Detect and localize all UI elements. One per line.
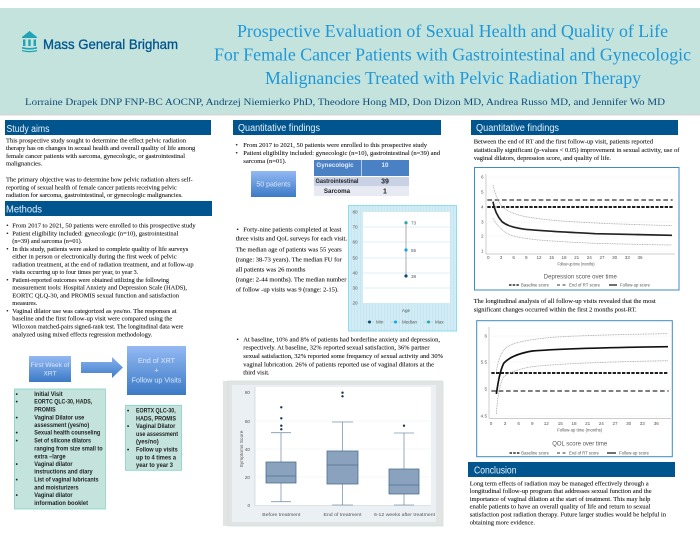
chart: QOL score over time: 5	[484, 387, 487, 392]
chart: age min median max: 30	[352, 286, 358, 290]
chart: symptoms score box plot: End of treatment	[324, 512, 362, 517]
list: initial visit items: Vaginal dilator	[34, 492, 73, 499]
list: follow up items: •	[127, 407, 129, 414]
methods bullet list: In this study, patients were asked to complete quality of life surveys	[12, 246, 189, 253]
study aims text: radiation for sarcoma, gastrointestinal, or gynecologic malignancies.	[6, 192, 183, 199]
chart: QOL score over time: 36	[654, 421, 659, 426]
chart: age min median max: 38	[411, 274, 417, 279]
methods bullet list	[6, 223, 196, 338]
methods bullet list: •	[6, 230, 9, 237]
list: initial visit items: •	[16, 461, 18, 468]
box: first week of XRT: XRT	[43, 370, 57, 378]
chart: depression score over time: 0	[487, 255, 490, 260]
list: initial visit items: EORTC QLC-30, HADS,	[34, 399, 93, 406]
title: For Female Cancer Patients with Gastrointestinal and Gynecologic	[214, 45, 691, 65]
chart: depression score over time: 4	[481, 205, 484, 210]
chart: QOL score over time: 6	[484, 334, 487, 339]
age text: •	[236, 227, 239, 234]
chart: depression score over time: 30	[612, 255, 618, 260]
list: follow up items	[126, 405, 182, 470]
table: tumour sites	[314, 160, 409, 196]
age text: all patients was 26 months	[236, 267, 306, 274]
methods bullet list: •	[6, 277, 9, 284]
chart: age min median max: Max	[435, 320, 444, 325]
age text: of follow -up visits was 9 (range: 2-15).	[236, 287, 339, 294]
box: end of treatment	[327, 422, 358, 505]
chart: QOL score over time: 3	[504, 421, 507, 426]
baseline findings text	[236, 337, 443, 376]
conclusion text: enable patients to have an overall quality of life and return to sexual	[470, 504, 651, 511]
age text	[236, 227, 347, 294]
methods bullet list: Patient eligibility included: gynecologic (n=10), gastrointestinal	[12, 230, 178, 237]
chart: age min median max: 55	[411, 248, 417, 253]
chart: depression score over time: 33	[625, 255, 630, 260]
chart: symptoms score box plot: Before treatment	[262, 512, 301, 517]
list: initial visit items: Vaginal Dilator use	[34, 414, 85, 421]
header banner	[0, 8, 700, 116]
methods bullet list: either in person or electronically during the first week of pelvic	[12, 254, 177, 261]
chart: QOL score over time: 27	[612, 421, 618, 426]
baseline findings text: •	[236, 337, 239, 344]
conclusion text: importance of vaginal dilation at the start of treatment. This may help	[470, 496, 651, 503]
chart: age min median max: Median	[402, 320, 418, 325]
methods bullet list: Patient-reported outcomes were obtained utilizing the following	[12, 277, 170, 284]
chart: age min median max: Min	[376, 320, 384, 325]
chart: QOL score over time: 9	[531, 421, 534, 426]
chart: age min median max: 60	[352, 240, 358, 244]
list: initial visit items: Vaginal dilator	[34, 461, 73, 468]
chart: QOL score over time: 24	[599, 421, 604, 426]
chart: symptoms score box plot	[223, 381, 443, 526]
list: follow up items: use assessment	[136, 431, 178, 438]
chart: symptoms score box plot: 0	[247, 503, 250, 508]
table: tumour sites: 39	[381, 178, 389, 186]
box: before treatment	[266, 433, 296, 502]
box: end of XRT and follow up visits: Follow up Visits	[132, 376, 182, 385]
legend: End of RT score	[569, 451, 599, 456]
list: initial visit items: information booklet	[34, 500, 88, 507]
panel: study aims	[5, 120, 211, 199]
box: first week of XRT	[29, 356, 71, 382]
methods bullet list: measurement tools: Hospital Anxiety and Depression Scale (HADS),	[12, 285, 187, 292]
legend	[510, 451, 649, 456]
chart: depression score over time: Follow-up time (months)	[558, 262, 595, 267]
chart: depression score over time: 6	[481, 175, 484, 180]
list: initial visit items: •	[16, 430, 18, 437]
list: initial visit items: •	[16, 414, 18, 421]
baseline findings text: third visit.	[243, 369, 270, 376]
list: initial visit items: PROMIS	[34, 406, 56, 413]
chart: depression score over time: 36	[637, 255, 643, 260]
list: initial visit items: •	[16, 391, 18, 398]
chart: age min median max	[348, 206, 456, 331]
conclusion text: satisfaction post radiation therapy. Future larger studies would be helpful in	[470, 511, 667, 518]
list: initial visit items: Initial Visit	[34, 391, 63, 398]
outliers	[280, 392, 405, 430]
conclusion text	[470, 480, 667, 526]
study aims text: This prospective study sought to determine the effect pelvic radiation	[6, 137, 187, 144]
longitudinal analysis text: significant changes occurred within the first 2 months post-RT.	[474, 307, 637, 314]
arrow	[81, 357, 123, 378]
methods bullet list: analyzed using mixed effects regression methodology.	[12, 331, 153, 338]
chart: symptoms score box plot: 80	[245, 390, 250, 395]
list: initial visit items: and moisturizers	[34, 484, 79, 491]
list: initial visit items: Sexual health counseling	[34, 430, 100, 437]
chart: depression score over time: 27	[599, 255, 605, 260]
chart: QOL score over time: 15	[558, 421, 563, 426]
chart: QOL score over time: 33	[640, 421, 645, 426]
list: initial visit items: •	[16, 492, 18, 499]
longitudinal analysis text	[474, 298, 656, 314]
chart: age min median max: 20	[352, 300, 358, 306]
heading: quantitative findings	[233, 120, 441, 135]
list: follow up items: •	[127, 446, 129, 453]
panel: quantitative findings, middle column	[223, 120, 456, 526]
title: Prospective Evaluation of Sexual Health and Quality of Life	[237, 21, 668, 41]
age text: three visits and QoL surveys for each visit.	[236, 236, 347, 243]
panel: conclusion	[468, 462, 675, 526]
legend: Follow-up score	[620, 283, 650, 288]
methods bullet list: baseline and the first follow-up visit were compared using the	[12, 316, 172, 323]
legend: Follow-up score	[619, 451, 649, 456]
chart: depression score over time: 6	[512, 255, 515, 260]
study aims text: therapy has on changes in sexual health and overall quality of life among	[6, 145, 196, 152]
heading: methods: Methods	[6, 204, 42, 216]
baseline findings text: respectively. At baseline, 32% reported sexual satisfaction, 36% partner	[243, 345, 430, 352]
box: first week of XRT: First Week of	[31, 362, 70, 369]
age text: Forty-nine patients completed at least	[243, 227, 341, 234]
list: initial visit items: List of vaginal lubricants	[34, 476, 99, 483]
enrolment text: •	[236, 142, 238, 149]
methods bullet list: •	[6, 223, 9, 230]
chart: depression score over time: 12	[536, 255, 542, 260]
list: initial visit items: Set of silicone dilators	[34, 437, 91, 444]
chart: symptoms score box plot: 40	[245, 447, 250, 452]
box: 6-12 weeks after treatment	[389, 433, 419, 505]
list: initial visit items: instructions and diary	[34, 469, 93, 476]
flow diagram: treatment timeline	[14, 346, 186, 509]
chart: QOL score over time: 18	[571, 421, 577, 426]
list: initial visit items: assessment (yes/no)	[34, 422, 89, 429]
chart: QOL score over time: 6	[517, 421, 520, 426]
methods bullet list: Vaginal dilator use was categorized as yes/no. The responses at	[12, 308, 177, 315]
chart: depression score over time: 9	[525, 255, 528, 260]
title	[214, 21, 691, 88]
chart: symptoms score box plot: Symptoms Score	[239, 430, 244, 468]
methods bullet list: •	[6, 308, 9, 315]
title: Malignancies Treated with Pelvic Radiation Therapy	[265, 68, 642, 88]
methods bullet list: radiation treatment, at the end of radiation treatment, and at follow-up	[12, 261, 194, 268]
study aims text: reporting of sexual health of female cancer patients receiving pelvic	[6, 184, 177, 191]
list: initial visit items: •	[16, 476, 18, 483]
significance text: Between the end of RT and the first follow-up visit, patients reported	[474, 139, 654, 146]
heading: study aims	[5, 120, 211, 135]
list: initial visit items: •	[16, 437, 18, 444]
logo wordmark: Mass General Brigham	[43, 37, 178, 52]
list: follow up items: up to 4 times a	[136, 454, 177, 461]
list: follow up items: EORTX QLC-30,	[136, 407, 176, 414]
chart: age min median max: 73	[411, 220, 417, 226]
significance text: vaginal dilators, depression score, and quality of life.	[474, 155, 611, 162]
legend: Baseline score	[521, 283, 549, 288]
enrolment text	[236, 142, 441, 165]
methods bullet list: (n=39) and sarcoma (n=01).	[12, 238, 83, 245]
heading: conclusion	[468, 462, 675, 477]
conclusion text: longitudinal follow-up program that addresses sexual function and the	[470, 488, 652, 495]
chart: symptoms score box plot: 6-12 weeks after treatment	[374, 512, 436, 517]
chart: QOL score over time: 5.5	[481, 360, 487, 365]
legend: End of RT score	[569, 283, 600, 288]
heading: conclusion: Conclusion	[474, 466, 516, 476]
list: initial visit items: ranging from size small to	[34, 445, 103, 452]
study aims text: malignancies.	[6, 161, 43, 168]
conclusion text: Long term effects of radiation may be managed effectively through a	[470, 480, 649, 487]
enrolment text: •	[236, 150, 238, 157]
list: follow up items: Follow up visits	[136, 446, 178, 453]
table: tumour sites: 1	[383, 188, 387, 196]
table: tumour sites: 10	[382, 162, 389, 169]
chart: QOL score over time: 4.5	[481, 414, 487, 419]
box: end of XRT and follow up visits: End of XRT	[138, 356, 176, 365]
chart: QOL score over time: 12	[544, 421, 549, 426]
enrolment text: Patient eligibility included: gynecologic (n=10), gastrointestinal (n=39) and	[243, 150, 441, 157]
chart: QOL score over time	[477, 321, 672, 457]
age text: The median age of patients was 55 years	[236, 247, 342, 254]
chart: symptoms score box plot: 60	[245, 419, 250, 424]
chart: QOL score over time: Follow-up time (months)	[557, 428, 603, 433]
heading: quantitative findings: Quantitative findings	[238, 123, 320, 134]
study aims text: The primary objective was to determine how pelvic radiation alters self-	[6, 176, 193, 183]
chart: depression score over time: 15	[549, 255, 554, 260]
panel: methods	[5, 201, 212, 338]
chart: depression score over time	[474, 168, 679, 290]
chart: depression score over time: 3	[481, 220, 484, 225]
chart: depression score over time: 5	[481, 190, 484, 195]
chart: depression score over time: 18	[561, 255, 567, 260]
heading: quantitative findings	[471, 120, 678, 135]
methods bullet list: EORTC QLQ-30, and PROMIS sexual function and satisfaction	[12, 292, 180, 299]
authors: Lorraine Drapek DNP FNP-BC AOCNP, Andrzej Niemierko PhD, Theodore Hong MD, Don Dizon MD, Andrea Russo MD, and Jennifer Wo MD	[25, 97, 665, 108]
chart: age min median max: 70	[352, 224, 358, 230]
chart: age min median max: 40	[352, 270, 358, 276]
study aims text: female cancer patients with sarcoma, gynecologic, or gastrointestinal	[6, 153, 185, 160]
chart: symptoms score box plot: 20	[245, 475, 250, 480]
baseline findings text: vaginal lubrication. 26% of patients reported use of vaginal dilators at the	[243, 361, 434, 368]
box: 50 patients: 50 patients	[256, 181, 291, 188]
box: 50 patients	[251, 171, 296, 197]
list: follow up items: HADS, PROMIS	[136, 415, 176, 422]
heading: study aims: Study aims	[6, 124, 50, 135]
age text: (range: 38-73 years). The median FU for	[236, 257, 342, 264]
panel: quantitative findings, right column	[471, 120, 680, 457]
chart: age min median max: 50	[352, 256, 358, 260]
age text: (range: 2-44 months). The median number	[236, 277, 347, 284]
heading: quantitative findings: Quantitative findings	[476, 123, 559, 134]
list: initial visit items	[14, 389, 105, 509]
chart: depression score over time: Depression score over time	[544, 273, 617, 280]
enrolment text: sarcoma (n=01).	[243, 158, 287, 165]
chart: depression score over time: 24	[587, 255, 592, 260]
table: tumour sites: Sarcoma	[324, 188, 351, 195]
significance text: statistically significant (p-values < 0.05) improvement in sexual activity, use of	[474, 147, 680, 154]
list: initial visit items: extra –large	[34, 453, 66, 460]
chart: age min median max: Age	[402, 308, 411, 313]
chart: QOL score over time: 0	[490, 421, 493, 426]
methods bullet list: •	[6, 246, 9, 253]
baseline findings text: sexual satisfaction, 32% reported some frequency of sexual activity and 30%	[243, 353, 443, 360]
list: follow up items: year to year 3	[136, 462, 174, 469]
significance text	[474, 139, 680, 162]
chart: age min median max: 80	[352, 210, 358, 214]
chart: depression score over time: 2	[481, 234, 484, 239]
study aims text	[6, 137, 196, 199]
list: follow up items: (yes/no)	[136, 439, 159, 446]
list: initial visit items: •	[16, 399, 18, 406]
methods bullet list: visits occurring up to four times per year, to year 3.	[12, 269, 139, 276]
enrolment text: From 2017 to 2021, 50 patients were enrolled to this prospective study	[243, 142, 428, 149]
list: follow up items: Vaginal Dilator	[136, 423, 176, 430]
heading: methods	[5, 201, 212, 216]
methods bullet list: measures.	[12, 300, 38, 307]
box: end of XRT and follow up visits: +	[154, 366, 159, 375]
conclusion text: obtaining more evidence.	[470, 519, 535, 526]
methods bullet list: Wilcoxon matched-pairs signed-rank test. The longitudinal data were	[12, 324, 183, 331]
chart: QOL score over time: 21	[585, 421, 591, 426]
list: follow up items: •	[127, 423, 129, 430]
chart: depression score over time: 1	[481, 249, 484, 254]
chart: QOL score over time: QOL score over time	[552, 440, 607, 448]
legend	[509, 283, 650, 288]
longitudinal analysis text: The longitudinal analysis of all follow-up visits revealed that the most	[474, 298, 656, 305]
methods bullet list: From 2017 to 2021, 50 patients were enrolled to this prospective study	[12, 223, 196, 230]
chart: depression score over time: 21	[574, 255, 580, 260]
chart: depression score over time: 3	[500, 255, 503, 260]
box: end of XRT and follow up visits	[127, 346, 186, 395]
table: tumour sites: Gynecologic	[316, 162, 354, 169]
chart: QOL score over time: 30	[626, 421, 632, 426]
legend: Baseline score	[521, 451, 549, 456]
icon: Mass General Brigham building logo	[22, 31, 37, 52]
table: tumour sites: Gastrointestinal	[316, 178, 359, 185]
baseline findings text: At baseline, 10% and 8% of patients had borderline anxiety and depression,	[243, 337, 440, 344]
